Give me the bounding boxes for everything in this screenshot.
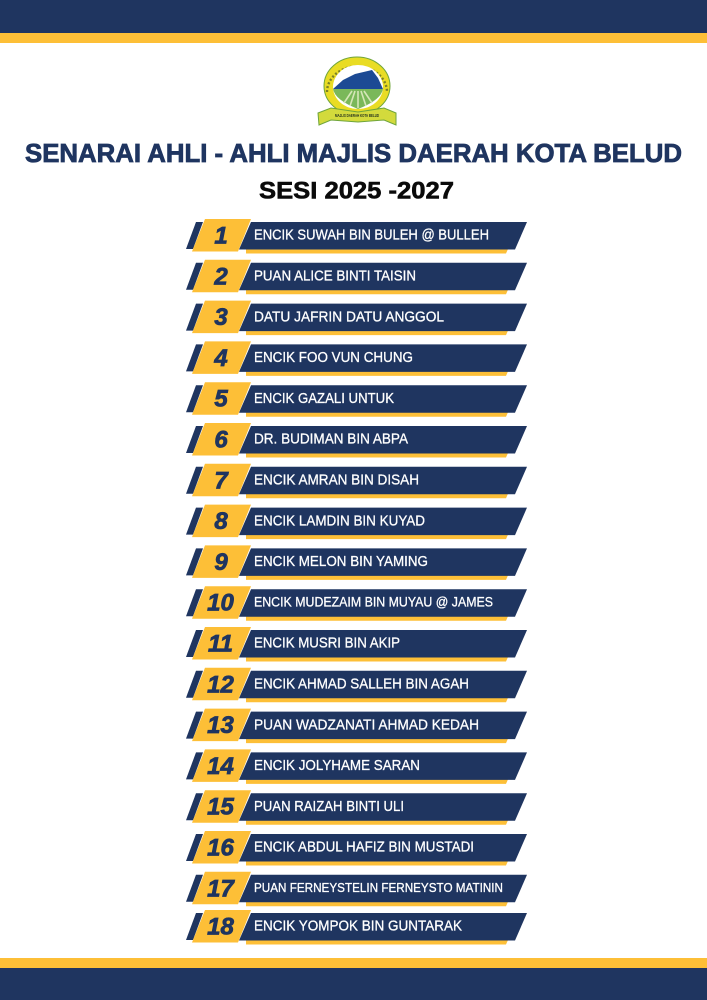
- row 17: PUAN FERNEYSTELIN FERNEYSTO MATININ: [254, 880, 503, 895]
- row 13: 13: [207, 712, 234, 739]
- row 8: 8: [214, 508, 228, 535]
- row 18: 18: [207, 914, 234, 940]
- row 9: [186, 545, 527, 580]
- row 1: [186, 219, 527, 254]
- row 10: ENCIK MUDEZAIM BIN MUYAU @ JAMES: [254, 594, 493, 610]
- row 6: DR. BUDIMAN BIN ABPA: [254, 431, 408, 448]
- row 4: ENCIK FOO VUN CHUNG: [254, 349, 413, 366]
- row 8: ENCIK LAMDIN BIN KUYAD: [254, 512, 425, 529]
- row 11: [186, 627, 527, 662]
- row 18: ENCIK YOMPOK BIN GUNTARAK: [254, 918, 462, 935]
- row 3: [186, 301, 527, 335]
- row 1: 1: [214, 222, 228, 250]
- row 9: 9: [214, 549, 228, 576]
- row 6: [186, 423, 527, 458]
- row 5: ENCIK GAZALI UNTUK: [254, 390, 394, 407]
- row 2: 2: [213, 263, 228, 290]
- bottom band: [0, 958, 707, 1000]
- row 14: 14: [207, 753, 234, 780]
- row 2: [186, 260, 527, 294]
- row 16: 16: [207, 834, 234, 862]
- logo: MAJLIS DAERAH KOTA BELUD: [335, 113, 379, 118]
- title: SENARAI AHLI - AHLI MAJLIS DAERAH KOTA BELUD: [25, 138, 682, 168]
- row 17: [186, 872, 527, 906]
- row 16: ENCIK ABDUL HAFIZ BIN MUSTADI: [254, 839, 474, 856]
- row 7: 7: [214, 467, 229, 494]
- row 3: DATU JAFRIN DATU ANGGOL: [254, 308, 444, 325]
- row 4: 4: [213, 345, 228, 372]
- row 12: [186, 668, 527, 702]
- logo: [318, 57, 396, 125]
- row 8: [186, 505, 527, 539]
- row 15: 15: [207, 794, 234, 821]
- row 14: [186, 749, 527, 784]
- row 12: 12: [207, 671, 234, 698]
- row 11: 11: [208, 630, 233, 658]
- row 13: [186, 709, 527, 743]
- row 1: ENCIK SUWAH BIN BULEH @ BULLEH: [254, 227, 489, 244]
- row 10: 10: [207, 590, 234, 617]
- row 13: PUAN WADZANATI AHMAD KEDAH: [254, 716, 479, 733]
- row 11: ENCIK MUSRI BIN AKIP: [254, 635, 400, 652]
- row 17: 17: [207, 875, 235, 902]
- row 2: PUAN ALICE BINTI TAISIN: [254, 267, 416, 284]
- row 14: ENCIK JOLYHAME SARAN: [254, 757, 420, 774]
- row 7: [186, 464, 527, 498]
- row 15: [186, 790, 527, 825]
- row 7: ENCIK AMRAN BIN DISAH: [254, 472, 419, 488]
- row 4: [186, 341, 527, 376]
- row 9: ENCIK MELON BIN YAMING: [254, 553, 428, 570]
- row 3: 3: [214, 304, 228, 331]
- row 12: ENCIK AHMAD SALLEH BIN AGAH: [254, 675, 469, 692]
- row 16: [186, 831, 527, 866]
- row 15: PUAN RAIZAH BINTI ULI: [254, 798, 404, 815]
- row 10: [186, 586, 527, 621]
- row 5: 5: [214, 386, 228, 413]
- top band: [0, 0, 707, 43]
- row 18: [186, 910, 527, 944]
- subtitle: SESI 2025 -2027: [259, 178, 454, 204]
- row 5: [186, 382, 527, 417]
- row 6: 6: [214, 426, 228, 454]
